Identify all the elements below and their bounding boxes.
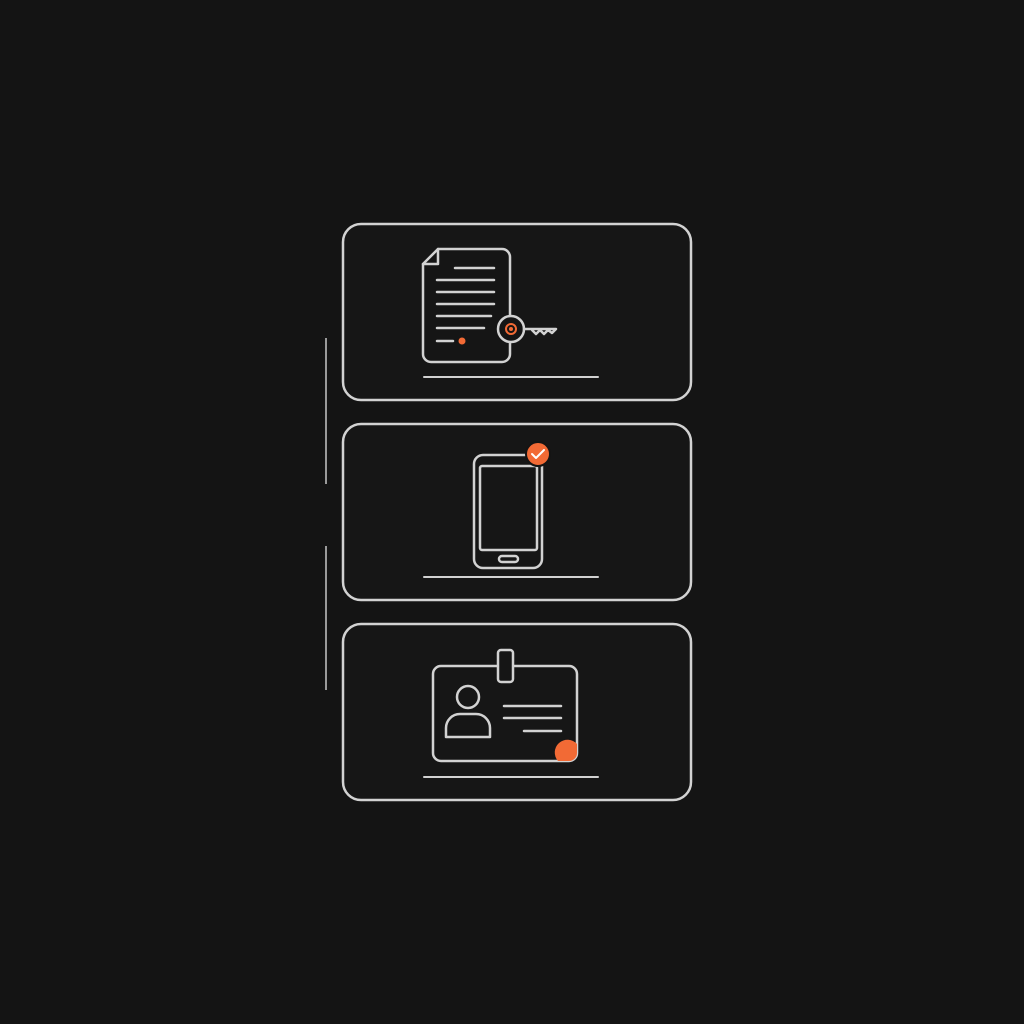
panel: ID badge [343,624,691,800]
icon: phone [474,455,542,568]
icon: ID card [433,650,577,761]
icon: key [498,316,556,342]
panel: phone verification [343,424,691,600]
timeline line: upper [325,338,327,484]
icon: check badge [526,442,550,466]
icon: document [423,249,510,362]
timeline line: lower [325,546,327,690]
panel: document with key [343,224,691,400]
